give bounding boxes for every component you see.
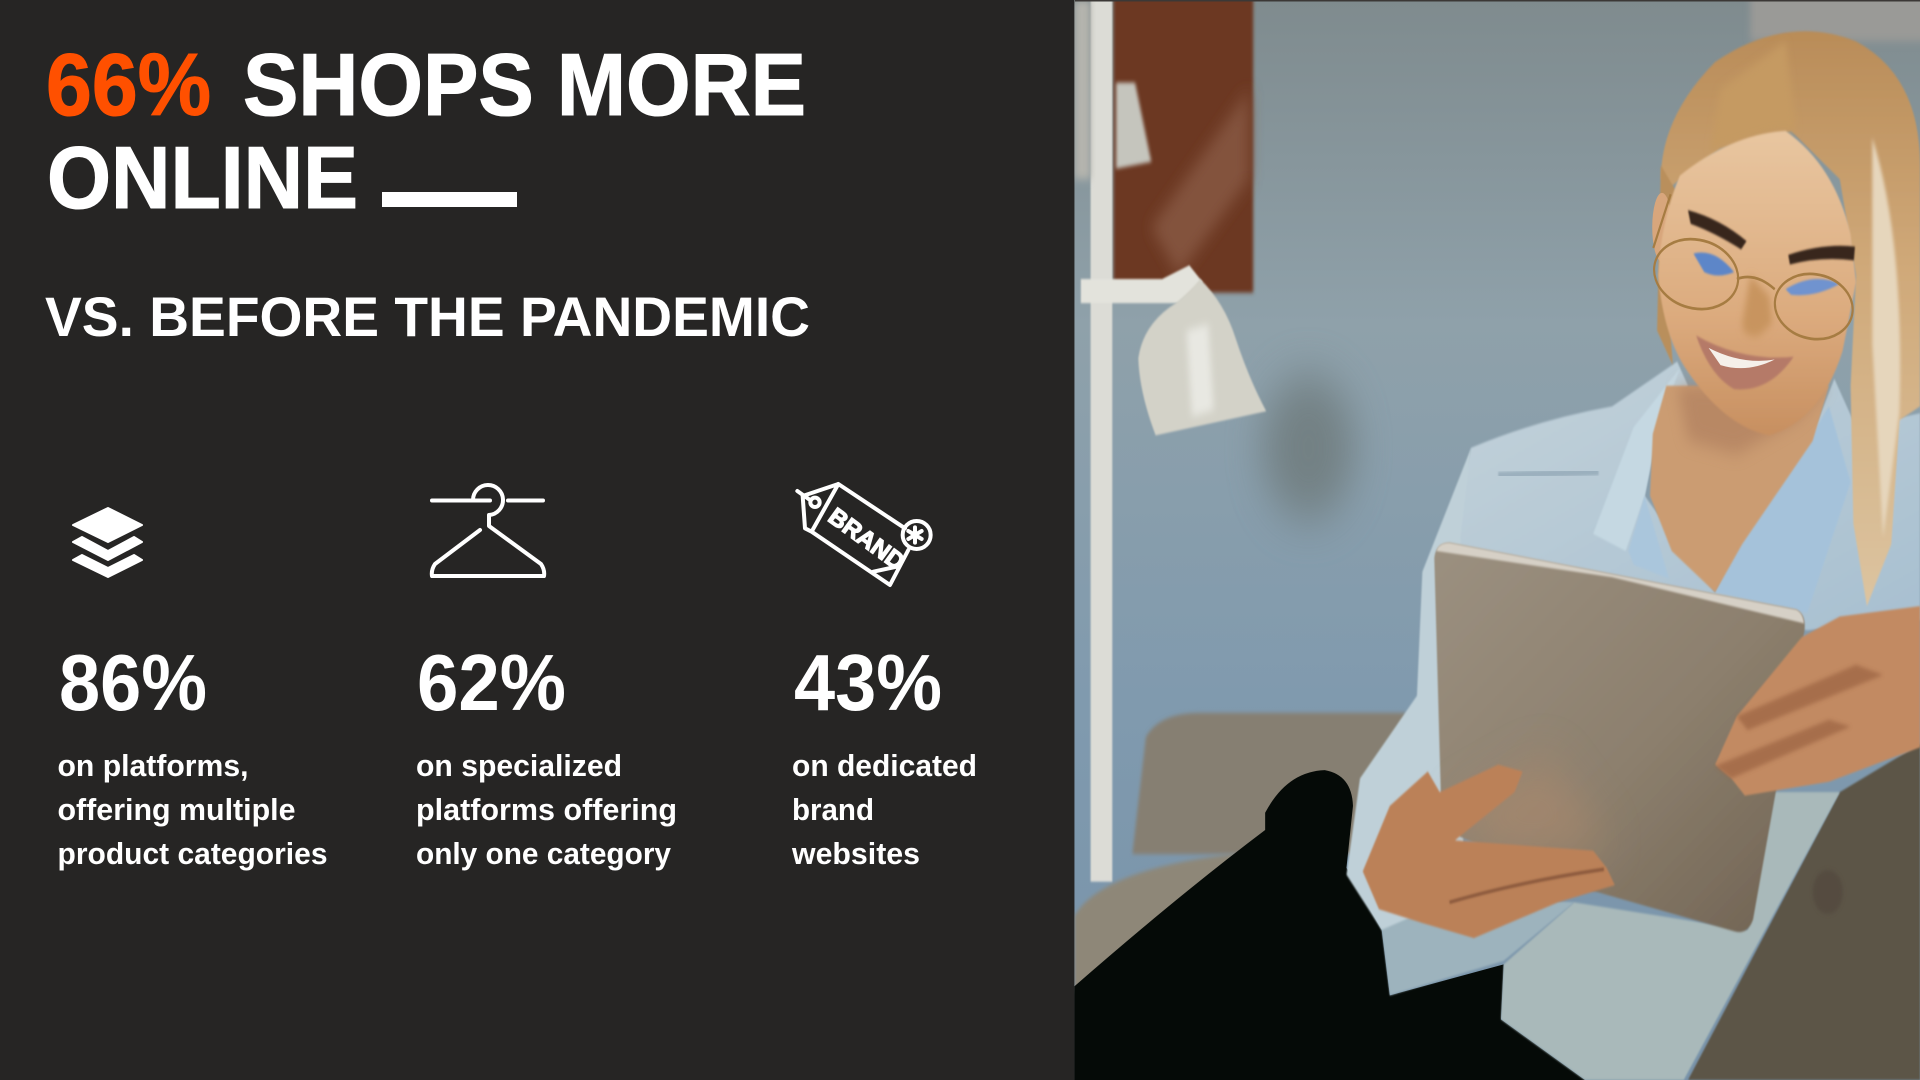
smile xyxy=(1696,335,1794,389)
icon: stacked layers xyxy=(73,508,142,577)
lower shirt xyxy=(1501,792,1840,1080)
glasses xyxy=(1650,194,1855,344)
lower hand xyxy=(1363,765,1615,938)
upper shirt xyxy=(1449,362,1920,630)
title xyxy=(46,35,806,227)
stat: 62%: 62% xyxy=(417,638,566,727)
description: only one category xyxy=(416,836,672,871)
panel: dark background xyxy=(0,0,1075,1080)
sleeve xyxy=(1346,448,1471,930)
column 1: platforms xyxy=(58,508,328,871)
subtitle: VS. BEFORE THE PANDEMIC xyxy=(45,285,810,348)
photo: woman reading on a tablet xyxy=(1074,0,1920,1080)
legs xyxy=(1074,770,1585,1080)
description: on platforms, xyxy=(58,748,248,783)
title line 1: SHOPS MORE xyxy=(243,35,806,134)
eyebrows xyxy=(1688,210,1855,264)
description: on dedicated xyxy=(792,748,977,783)
description xyxy=(791,748,977,871)
lower shirt hem xyxy=(1372,901,1573,997)
stat: 86%: 86% xyxy=(59,638,207,727)
tablet xyxy=(1434,543,1805,932)
description: websites xyxy=(791,836,920,871)
column 2: specialized platforms xyxy=(416,485,677,871)
description xyxy=(58,748,328,871)
title line 2: ONLINE xyxy=(47,128,358,227)
title dash xyxy=(382,192,517,207)
stat: 43%: 43% xyxy=(794,638,942,727)
description: brand xyxy=(792,792,874,827)
description xyxy=(416,748,677,871)
photo top edge xyxy=(1075,0,1920,2)
icon: brand tag: BRAND xyxy=(823,503,910,576)
icon: brand tag xyxy=(797,484,931,585)
hair back xyxy=(1661,31,1920,606)
neck and chest xyxy=(1650,386,1829,592)
ear xyxy=(1652,193,1670,260)
upper hand xyxy=(1715,606,1920,796)
face xyxy=(1658,131,1856,435)
icon: hanger xyxy=(432,485,544,576)
column 3: brand websites xyxy=(791,484,977,871)
description: offering multiple xyxy=(58,792,296,827)
description: product categories xyxy=(58,836,328,871)
description: on specialized xyxy=(416,748,622,783)
title highlight: 66%: 66% xyxy=(46,35,211,134)
eyes behind lenses xyxy=(1693,252,1734,276)
description: platforms offering xyxy=(416,792,677,827)
right sofa arm xyxy=(1688,744,1920,1080)
